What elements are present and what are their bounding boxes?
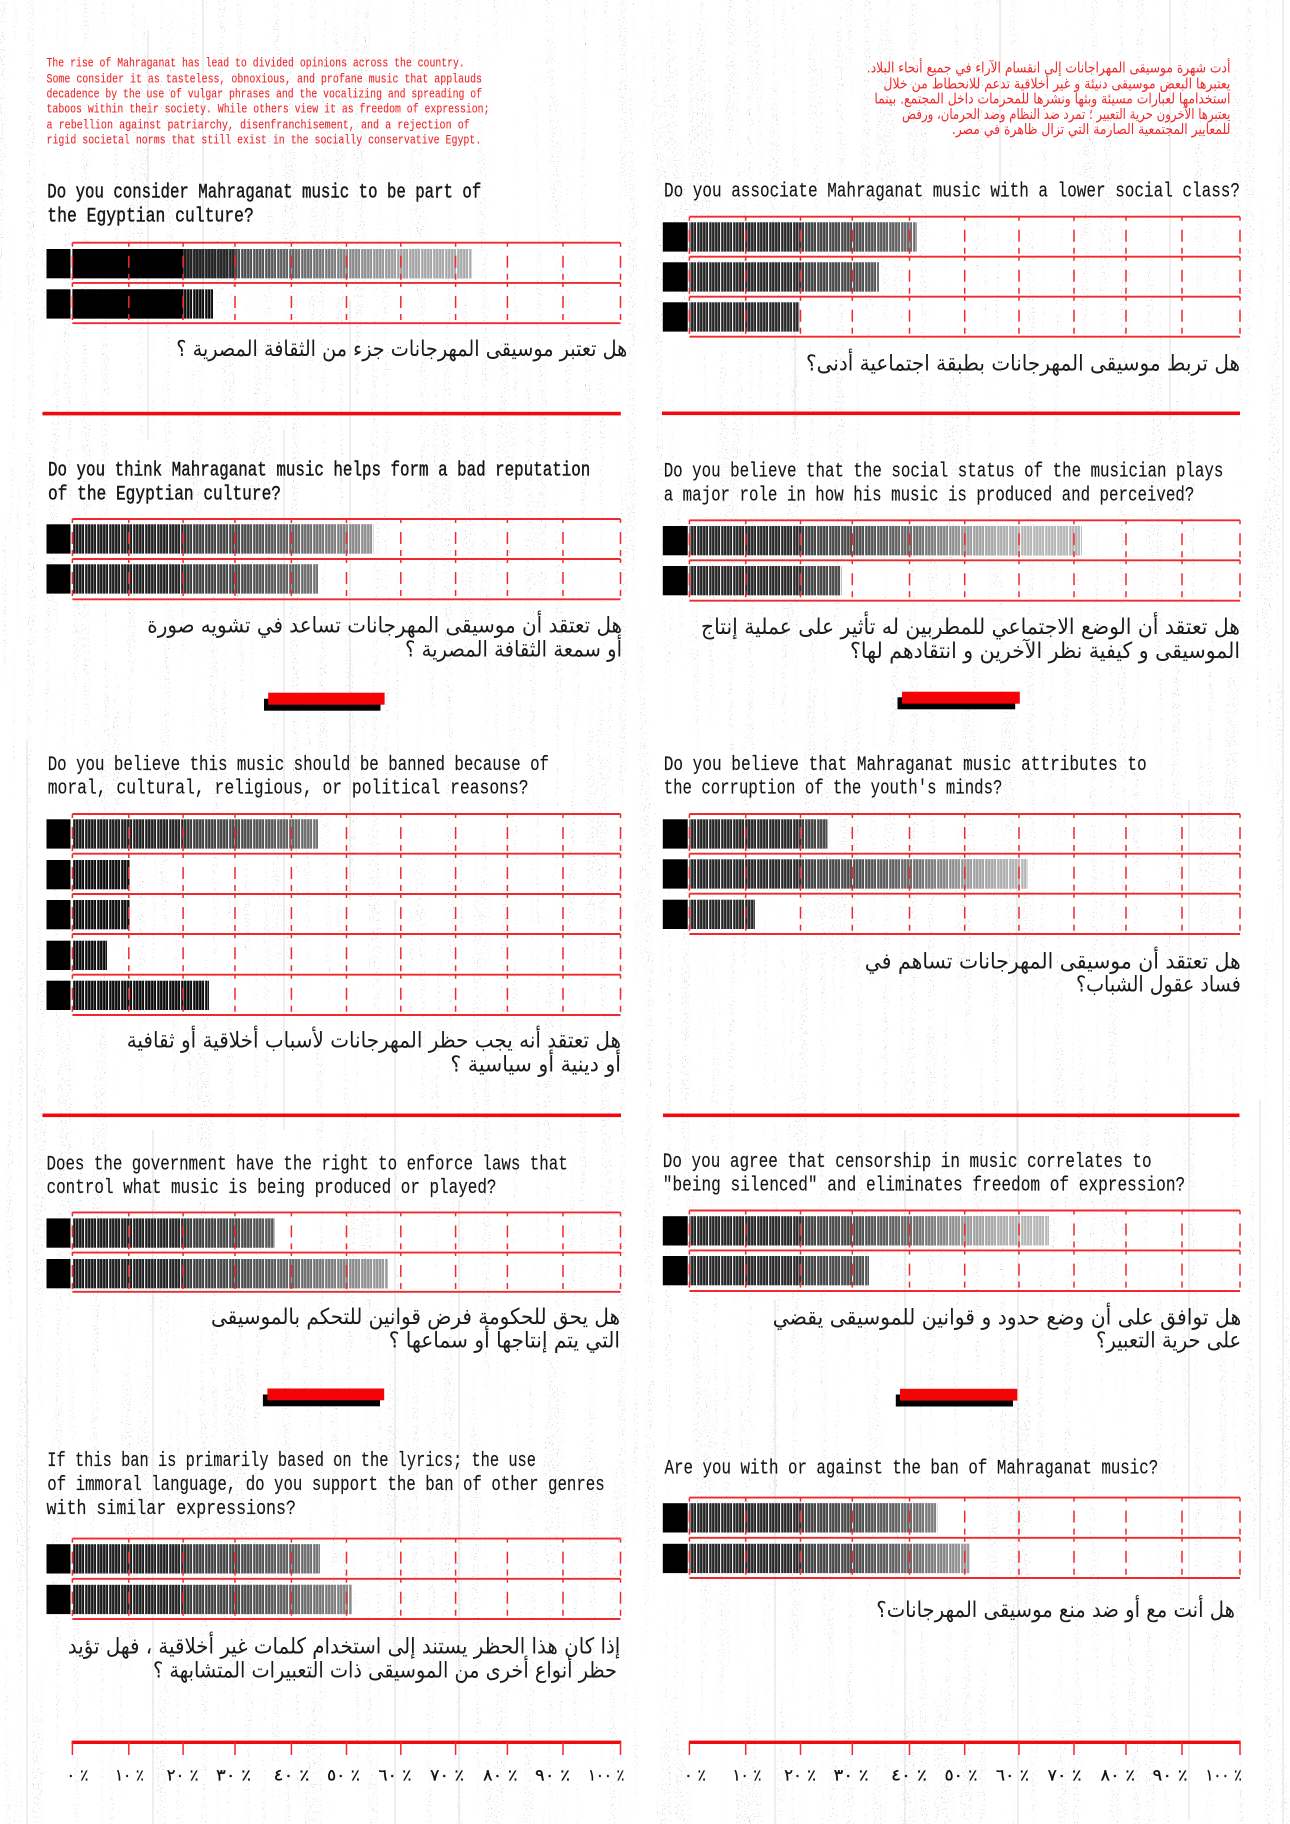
- question Arabic: [147, 611, 622, 663]
- intro text: Arabic: للمعايير المجتمعية الصارمة التي تزال ظاهرة في مصر.: [952, 122, 1230, 138]
- bar chart: [663, 1498, 1240, 1578]
- axis labels: ٦٠ ٪: [996, 1766, 1029, 1785]
- axis labels: ٧٠ ٪: [1048, 1766, 1082, 1785]
- intro text: English: rigid societal norms that still exist in the socially conservative Egypt.: [46, 133, 481, 148]
- divider left top: [42, 412, 621, 415]
- panel: with or against the ban: [663, 1458, 1240, 1623]
- axis labels: ١٠ ٪: [732, 1766, 762, 1785]
- question English: Does the government have the right to enforce laws that: [46, 1154, 568, 1176]
- question Arabic: على حرية التعبير؟: [1096, 1328, 1241, 1354]
- axis labels: ٣٠ ٪: [834, 1766, 868, 1785]
- question English: [664, 461, 1223, 508]
- intro text: English: taboos within their society. While others view it as freedom of expression;: [46, 102, 490, 117]
- question English: Do you believe this music should be banned because of: [48, 754, 549, 777]
- axis labels: ٢٠ ٪: [784, 1766, 816, 1785]
- question Arabic: أو دينية أو سياسية ؟: [450, 1050, 621, 1078]
- panel: ban based on lyrics: [46, 1450, 620, 1683]
- bar chart: [663, 1210, 1240, 1291]
- block separator left upper: [264, 693, 385, 711]
- axis labels: ٣٠ ٪: [216, 1766, 251, 1785]
- question English: [663, 1151, 1185, 1198]
- panel: government right to enforce laws: [46, 1154, 620, 1354]
- axis labels: ٦٠ ٪: [378, 1766, 411, 1785]
- question Arabic: فساد عقول الشباب؟: [1076, 973, 1241, 998]
- axis labels: ٥٠ ٪: [327, 1766, 360, 1785]
- question English: Are you with or against the ban of Mahraganat music?: [664, 1458, 1158, 1480]
- intro text: Arabic: استخدامها لعبارات مسيئة وبثها ونشرها للمحرمات داخل المجتمع. بينما: [874, 91, 1230, 107]
- question Arabic: [127, 1026, 621, 1078]
- block separator left lower: [263, 1388, 384, 1406]
- question English: control what music is being produced or played?: [46, 1177, 496, 1200]
- question Arabic: هل تعتقد أن الوضع الاجتماعي للمطربين له تأثير على عملية إنتاج: [701, 611, 1240, 640]
- question Arabic: هل يحق للحكومة فرض قوانين للتحكم بالموسيقى: [211, 1305, 620, 1330]
- intro text: English: [46, 56, 490, 148]
- intro text: English: a rebellion against patriarchy, disenfranchisement, and a rejection of: [46, 117, 470, 132]
- question English: the Egyptian culture?: [47, 205, 254, 228]
- panel: bad reputation: [46, 460, 622, 663]
- question Arabic: إذا كان هذا الحظر يستند إلى استخدام كلمات غير أخلاقية ، فهل تؤيد: [68, 1632, 620, 1660]
- question Arabic: أو سمعة الثقافة المصرية ؟: [405, 635, 622, 663]
- intro text: English: decadence by the use of vulgar phrases and the vocalizing and spreading of: [46, 87, 482, 102]
- intro text: English: The rise of Mahraganat has lead to divided opinions across the country.: [46, 56, 465, 71]
- question English: [46, 1154, 568, 1200]
- bar chart: [46, 1539, 620, 1619]
- question English: [664, 754, 1147, 801]
- question Arabic: هل تعتقد أنه يجب حظر المهرجانات لأسباب أخلاقية أو ثقافية: [127, 1026, 621, 1054]
- block separator right upper: [898, 692, 1020, 709]
- question Arabic: هل أنت مع أو ضد منع موسيقى المهرجانات؟: [876, 1595, 1235, 1623]
- panel: social status of musician: [663, 461, 1240, 664]
- question English: moral, cultural, religious, or political reasons?: [48, 778, 529, 801]
- bar chart: [46, 814, 620, 1015]
- question English: with similar expressions?: [46, 1498, 296, 1521]
- axis labels: ١٠٠ ٪: [1206, 1766, 1242, 1785]
- bar chart: [663, 217, 1240, 337]
- bar chart: [46, 243, 620, 323]
- divider right middle: [663, 1114, 1240, 1117]
- axis labels: [67, 1766, 624, 1785]
- axis labels: ٧٠ ٪: [430, 1766, 464, 1785]
- axis labels: ٨٠ ٪: [483, 1766, 518, 1785]
- question Arabic: هل تعتبر موسيقى المهرجانات جزء من الثقافة المصرية ؟: [176, 337, 627, 362]
- question English: of immoral language, do you support the ban of other genres: [47, 1474, 605, 1497]
- panel: corruption of youth: [663, 754, 1241, 998]
- intro text: Arabic: يعتبرها البعض موسيقى دنيئة و غير أخلاقية تدعم للانحطاط من خلال: [883, 73, 1230, 92]
- intro text: English: Some consider it as tasteless, obnoxious, and profane music that applauds: [46, 71, 482, 86]
- question English: Do you believe that Mahraganat music attributes to: [664, 754, 1147, 777]
- block separator right lower: [896, 1389, 1017, 1406]
- axis labels: ٨٠ ٪: [1100, 1766, 1135, 1785]
- question Arabic: حظر أنواع أخرى من الموسيقى ذات التعبيرات المتشابهة ؟: [153, 1655, 617, 1683]
- question Arabic: هل توافق على أن وضع حدود و قوانين للموسيقى يقضي: [773, 1302, 1241, 1330]
- question Arabic: هل تعتقد أن موسيقى المهرجانات تساهم في: [865, 946, 1241, 974]
- question Arabic: هل تعتقد أن موسيقى المهرجانات تساعد في تشويه صورة: [147, 611, 622, 639]
- intro text: Arabic: [867, 58, 1230, 138]
- question English: [48, 754, 549, 801]
- question English: Do you agree that censorship in music correlates to: [663, 1151, 1152, 1174]
- question English: the corruption of the youth's minds?: [664, 778, 1002, 801]
- question English: of the Egyptian culture?: [48, 483, 281, 506]
- question English: [47, 182, 481, 228]
- question Arabic: [701, 611, 1240, 664]
- question Arabic: الموسيقى و كيفية نظر الآخرين و انتقادهم لها؟: [850, 638, 1240, 664]
- axis labels: ١٠ ٪: [115, 1766, 144, 1785]
- percentage axis right: [684, 1741, 1242, 1785]
- bar chart: [663, 520, 1240, 601]
- question Arabic: [773, 1302, 1241, 1354]
- axis labels: ٤٠ ٪: [891, 1766, 927, 1785]
- axis labels: ٥٠ ٪: [944, 1766, 978, 1785]
- intro text: Arabic: أدت شهرة موسيقى المهراجانات إلى انقسام الآراء في جميع أنحاء البلاد.: [867, 58, 1230, 77]
- divider right top: [662, 412, 1240, 415]
- question English: Do you consider Mahraganat music to be part of: [47, 182, 481, 205]
- question Arabic: [68, 1632, 620, 1683]
- axis labels: ٠ ٪: [67, 1766, 88, 1785]
- bar chart: [46, 519, 620, 599]
- axis labels: ٠ ٪: [684, 1766, 706, 1785]
- question Arabic: [865, 946, 1241, 998]
- question English: [48, 460, 590, 506]
- axis labels: ٩٠ ٪: [1152, 1766, 1188, 1785]
- panel: censorship and freedom of expression: [663, 1151, 1241, 1354]
- percentage axis left: [67, 1741, 624, 1785]
- panel: banned for moral reasons: [46, 754, 621, 1078]
- axis labels: ١٠٠ ٪: [588, 1766, 624, 1785]
- axis labels: ٢٠ ٪: [167, 1766, 199, 1785]
- panel: lower social class: [663, 181, 1240, 377]
- axis labels: ٩٠ ٪: [535, 1766, 570, 1785]
- axis labels: ٤٠ ٪: [274, 1766, 309, 1785]
- question Arabic: التي يتم إنتاجها أو سماعها ؟: [389, 1326, 620, 1354]
- divider left middle: [42, 1114, 621, 1117]
- panel: part of Egyptian culture: [46, 182, 627, 362]
- question Arabic: هل تربط موسيقى المهرجانات بطبقة اجتماعية أدنى؟: [806, 349, 1240, 377]
- question English: If this ban is primarily based on the lyrics; the use: [47, 1450, 536, 1473]
- question English: [46, 1450, 605, 1521]
- bar chart: [663, 814, 1240, 934]
- axis labels: [684, 1766, 1242, 1785]
- question Arabic: [211, 1305, 620, 1354]
- bar chart: [46, 1212, 620, 1292]
- question English: Do you think Mahraganat music helps form a bad reputation: [48, 460, 590, 483]
